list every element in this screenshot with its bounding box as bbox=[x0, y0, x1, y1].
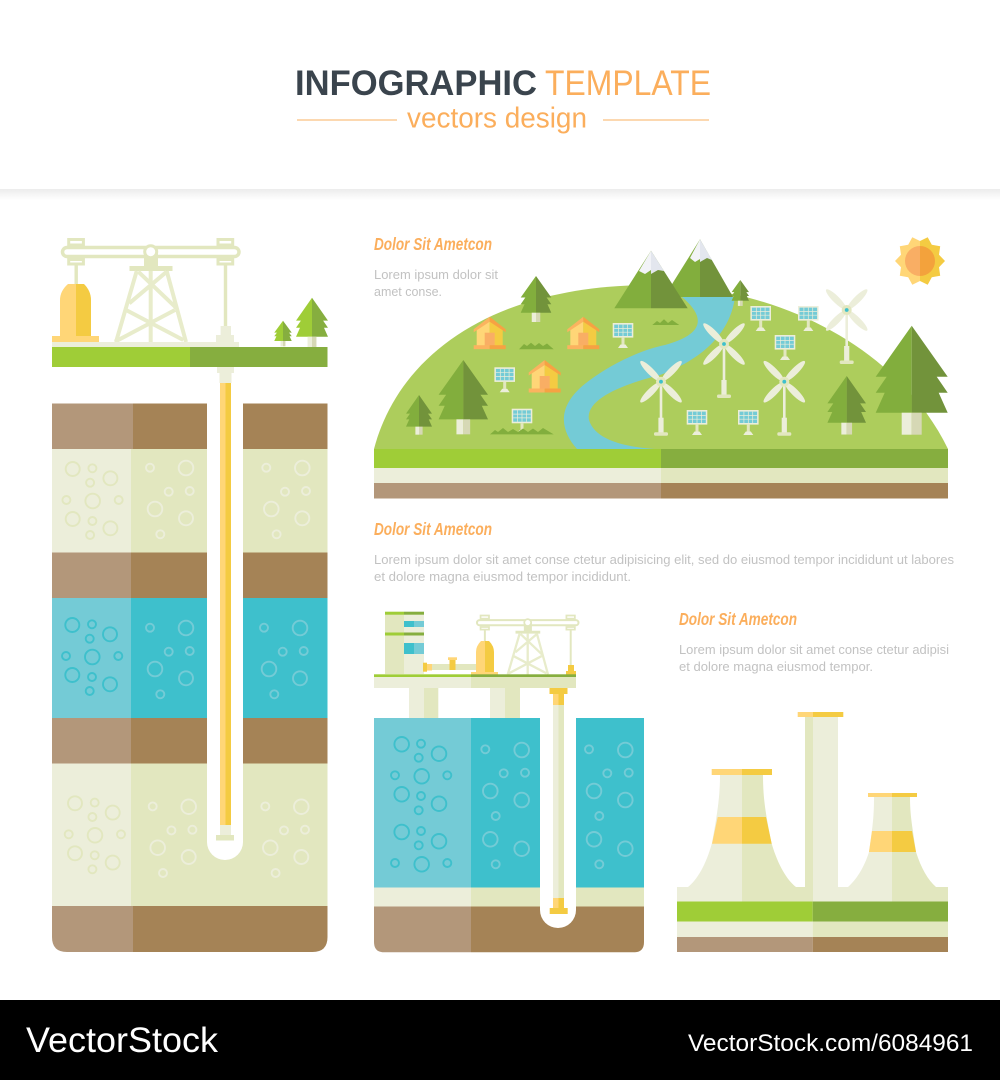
well pipe bbox=[550, 688, 568, 914]
icon: house two bbox=[567, 317, 599, 349]
header shadow band bbox=[0, 189, 1000, 200]
footer url: VectorStock.com/6084961 bbox=[688, 1030, 973, 1057]
text block: landscape bbox=[374, 267, 498, 299]
icon: sun bbox=[895, 237, 945, 285]
icon: tiny tree by mountain bbox=[732, 280, 749, 306]
title: TEMPLATE bbox=[545, 64, 711, 103]
mountain front bbox=[614, 251, 688, 308]
text block: offshore bbox=[374, 552, 954, 584]
water and soil layers bbox=[374, 718, 644, 952]
title bbox=[295, 64, 711, 103]
text block: offshore: Lorem ipsum dolor sit amet conse ctetur adipisicing elit, sed do eiusmod tempor incididunt ut labores bbox=[374, 552, 954, 567]
footer bar bbox=[0, 1000, 1000, 1080]
icon: oil pump rig bbox=[62, 240, 239, 342]
panel: green landscape illustration bbox=[374, 237, 948, 498]
platform legs bbox=[409, 688, 520, 718]
text block: power plant: et dolore magna eiusmod tempor. bbox=[679, 659, 873, 674]
bubbles: offshore dark columns bbox=[481, 743, 633, 868]
title: INFOGRAPHIC bbox=[295, 64, 537, 103]
icon: rig on platform bbox=[477, 616, 578, 674]
hill bbox=[374, 285, 948, 449]
icon: tree left bbox=[439, 360, 488, 434]
heading: offshore: Dolor Sit Ametcon bbox=[374, 519, 492, 539]
icon: house three bbox=[529, 360, 561, 392]
ground layers bbox=[677, 902, 948, 952]
bubbles: lower rock layer bbox=[65, 796, 309, 877]
rig base pad bbox=[52, 326, 239, 347]
wind turbines bbox=[638, 287, 870, 436]
icon: small cooling tower bbox=[830, 793, 948, 902]
ground layers bbox=[374, 449, 948, 498]
text block: landscape: Lorem ipsum dolor sit bbox=[374, 267, 498, 282]
icon: big tree bbox=[296, 298, 328, 347]
well bore bbox=[540, 718, 576, 928]
text block: power plant bbox=[679, 642, 949, 674]
ground strip bbox=[52, 347, 328, 367]
icon: tank on platform bbox=[471, 641, 498, 674]
soil layers bbox=[52, 404, 328, 952]
platform deck bbox=[374, 674, 576, 688]
heading: landscape: Dolor Sit Ametcon bbox=[374, 234, 492, 254]
solar panels bbox=[494, 306, 819, 435]
well bore bbox=[207, 403, 243, 860]
icon: storage tank bbox=[52, 284, 99, 342]
icon: chimney bbox=[798, 712, 843, 902]
well pipe bbox=[216, 367, 234, 840]
panel: onshore well cross-section bbox=[52, 240, 328, 952]
icon: small tree left bbox=[406, 395, 432, 435]
bubbles: water layer bbox=[62, 618, 308, 698]
grass tufts bbox=[490, 319, 679, 434]
bubbles: offshore light column bbox=[391, 737, 451, 872]
mountain back bbox=[664, 239, 733, 297]
text block: power plant: Lorem ipsum dolor sit amet conse ctetur adipisi bbox=[679, 642, 949, 657]
icon: house one bbox=[474, 317, 506, 349]
text block: landscape: amet conse. bbox=[374, 284, 442, 299]
icon: platform building bbox=[385, 612, 424, 674]
icon: medium tree right bbox=[827, 376, 866, 435]
text block: offshore: et dolore magna eiusmod tempor incididunt. bbox=[374, 569, 631, 584]
icon: tree top bbox=[521, 276, 551, 322]
icon: small tree bbox=[274, 321, 292, 346]
icon: wellhead on platform bbox=[566, 665, 576, 674]
icon: pipe and valve bbox=[423, 657, 476, 672]
bubbles: upper rock layer bbox=[62, 461, 310, 539]
river bbox=[564, 297, 735, 449]
panel: offshore platform cross-section bbox=[374, 612, 644, 952]
heading: power plant: Dolor Sit Ametcon bbox=[679, 609, 797, 629]
icon: large cooling tower bbox=[677, 769, 813, 902]
icon: large tree right bbox=[876, 326, 948, 435]
subtitle with rules: vectors design bbox=[407, 102, 587, 134]
footer logo: VectorStock bbox=[26, 1021, 219, 1060]
panel: power plant bbox=[677, 712, 948, 952]
